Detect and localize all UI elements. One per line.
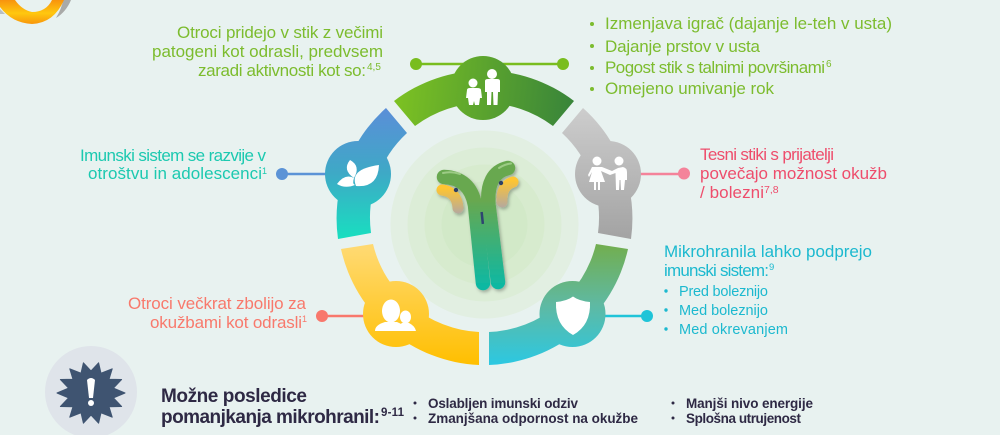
text: close contacts — [700, 145, 887, 202]
text: close contacts: povečajo možnost okužb — [700, 164, 887, 183]
heading: possible consequences: pomanjkanja mikrohranil: — [161, 407, 380, 428]
text: children exposure: patogeni kot odrasli, predvsem — [152, 42, 383, 61]
text: micronutrients support: 9 — [769, 262, 774, 273]
list: consequences left column: Zmanjšana odpornost na okužbe — [428, 411, 638, 426]
left antigen binding fragment — [442, 190, 458, 208]
text: immune system develops: Imunski sistem se razvije v — [80, 146, 266, 165]
icon: two friends — [588, 156, 627, 190]
text: exposure list: 6 — [826, 59, 832, 70]
text: exposure list: Izmenjava igrač (dajanje le-teh v usta) — [605, 14, 892, 33]
ring segment: gray / friends — [562, 108, 690, 239]
connector: coral — [316, 310, 368, 322]
text: micronutrients support: Med okrevanjem — [679, 322, 788, 338]
list: consequences right column: Manjši nivo energije — [686, 396, 813, 411]
text: micronutrients support — [664, 242, 872, 338]
text: micronutrients support: Med boleznijo — [679, 303, 768, 319]
right antigen binding fragment — [502, 182, 513, 202]
icon: parent and child busts — [375, 300, 416, 331]
connector: blue — [276, 168, 330, 180]
antibody illustration — [442, 164, 513, 283]
logo fragment: orange ring — [0, 0, 71, 24]
text: exposure list — [590, 14, 892, 98]
text: children exposure: Otroci pridejo v stik z večimi — [177, 23, 383, 42]
text: immune system develops: 1 — [262, 166, 267, 176]
ring segment: green / children — [394, 56, 574, 126]
text: exposure list: Pogost stik s talnimi površinami — [605, 58, 825, 77]
text: close contacts: 7,8 — [764, 184, 779, 196]
text: children get sick more often — [128, 294, 307, 332]
text: children exposure — [152, 23, 383, 80]
text: close contacts: / bolezni — [700, 183, 764, 202]
text: immune system develops: otroštvu in adolescenci — [88, 164, 262, 183]
heading: possible consequences — [161, 386, 405, 428]
text: exposure list: Omejeno umivanje rok — [605, 79, 774, 98]
icon: child and adult — [466, 69, 500, 105]
list: consequences left column: Oslabljen imunski odziv — [428, 396, 578, 411]
right heavy chain — [488, 168, 508, 282]
text: immune system develops — [80, 146, 267, 183]
icon: shield — [556, 296, 590, 335]
ring segment: leaf / immune system — [276, 108, 407, 239]
icon: warning badge — [45, 346, 137, 435]
text: close contacts: Tesni stiki s prijatelji — [700, 145, 834, 164]
text: micronutrients support: Mikrohranila lahko podprejo — [664, 242, 872, 261]
heading: possible consequences: 9-11 — [381, 407, 405, 419]
list: consequences right column: Splošna utrujenost — [686, 411, 802, 426]
ring segment: teal / shield — [489, 244, 653, 365]
connector: cyan — [600, 310, 653, 322]
text: children get sick more often: okužbami kot odrasli — [150, 313, 302, 332]
ring segment: yellow / adults and child — [316, 244, 479, 365]
text: micronutrients support: imunski sistem: — [664, 261, 769, 280]
highlights and bonds — [443, 164, 511, 224]
central glow circles — [390, 130, 578, 318]
connector: pink — [636, 168, 690, 180]
left heavy chain — [444, 177, 483, 283]
icon: leaves — [337, 160, 379, 187]
connector: green — [410, 58, 569, 70]
list: consequences right column — [672, 396, 813, 426]
text: exposure list: Dajanje prstov v usta — [605, 37, 761, 56]
heading: possible consequences: Možne posledice — [161, 386, 307, 407]
text: children exposure: zaradi aktivnosti kot so: — [198, 61, 366, 80]
text: children exposure: 4,5 — [367, 62, 381, 73]
text: micronutrients support: Pred boleznijo — [679, 284, 768, 300]
text: children get sick more often: Otroci večkrat zbolijo za — [128, 294, 307, 313]
list: consequences left column — [414, 396, 638, 426]
text: children get sick more often: 1 — [302, 314, 307, 324]
